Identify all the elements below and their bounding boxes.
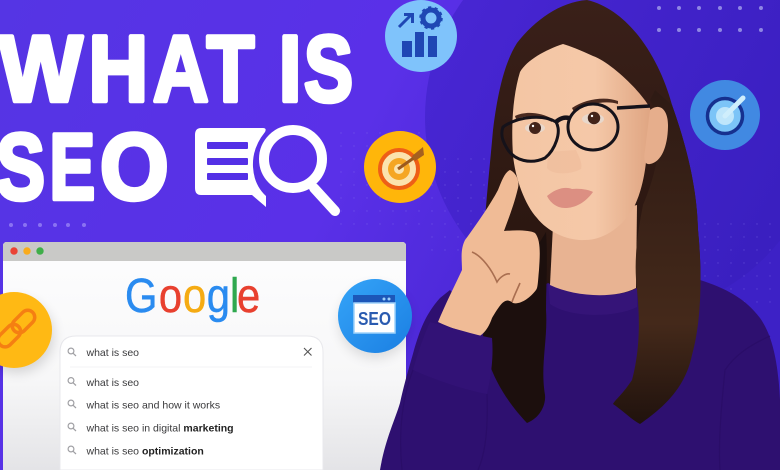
Google logo: g xyxy=(207,268,230,323)
eyebrows xyxy=(515,99,618,122)
glasses xyxy=(502,104,650,161)
search suggestions xyxy=(86,377,234,458)
title line 1: W xyxy=(0,16,83,121)
browser body xyxy=(3,242,406,470)
icon: document speech bubble with magnifier xyxy=(195,128,335,211)
search suggestions: what is seo and how it works xyxy=(86,400,220,412)
browser title bar xyxy=(3,242,406,261)
Google logo: o xyxy=(183,268,206,323)
title line 2: O xyxy=(100,114,169,219)
icon: yellow link badge xyxy=(0,292,54,373)
window control dots xyxy=(10,247,44,255)
title line 1: S xyxy=(304,16,353,121)
search suggestions: what is seo in digital marketing xyxy=(86,422,234,434)
hair front: right lock xyxy=(613,90,700,424)
title line 1: I xyxy=(279,16,302,121)
collar xyxy=(548,283,637,315)
title line 1: T xyxy=(207,16,254,121)
sweater seams xyxy=(401,336,770,470)
title line 2: E xyxy=(50,114,95,219)
icon: SEO browser badge: SEO xyxy=(358,308,391,329)
hand with raised finger xyxy=(438,170,540,337)
search query: what is seo xyxy=(86,347,139,359)
search box xyxy=(60,336,323,470)
hair back xyxy=(481,0,700,424)
nose xyxy=(547,150,581,173)
search icons xyxy=(68,348,76,454)
title line 1: H xyxy=(88,16,148,121)
panel: browser window xyxy=(3,242,406,470)
icon: orange target badge xyxy=(364,131,436,203)
search suggestions: what is seo xyxy=(86,377,139,389)
face xyxy=(512,44,651,240)
sleeve cuff xyxy=(413,322,493,394)
Google logo: l xyxy=(230,268,239,323)
person: woman with glasses xyxy=(380,0,780,470)
title: WHAT IS SEO xyxy=(0,16,353,219)
clear icon xyxy=(304,348,312,356)
neck xyxy=(550,205,637,295)
sweater xyxy=(380,280,780,470)
icon: blue target badge xyxy=(690,80,760,150)
Google logo: e xyxy=(237,268,260,323)
dot grid top right xyxy=(657,6,763,32)
ear xyxy=(644,107,668,164)
lips xyxy=(547,188,593,208)
icon: SEO browser badge xyxy=(338,279,412,358)
icon: chart and gear badge xyxy=(385,0,457,72)
finger crease xyxy=(472,252,520,302)
Google logo: G xyxy=(125,268,157,323)
hair front over sweater: left lock xyxy=(483,232,547,423)
search suggestions: what is seo optimization xyxy=(86,446,204,458)
title line 1: A xyxy=(153,16,209,121)
Google logo: o xyxy=(159,268,182,323)
eyes xyxy=(525,112,604,134)
dot row left xyxy=(9,223,86,227)
